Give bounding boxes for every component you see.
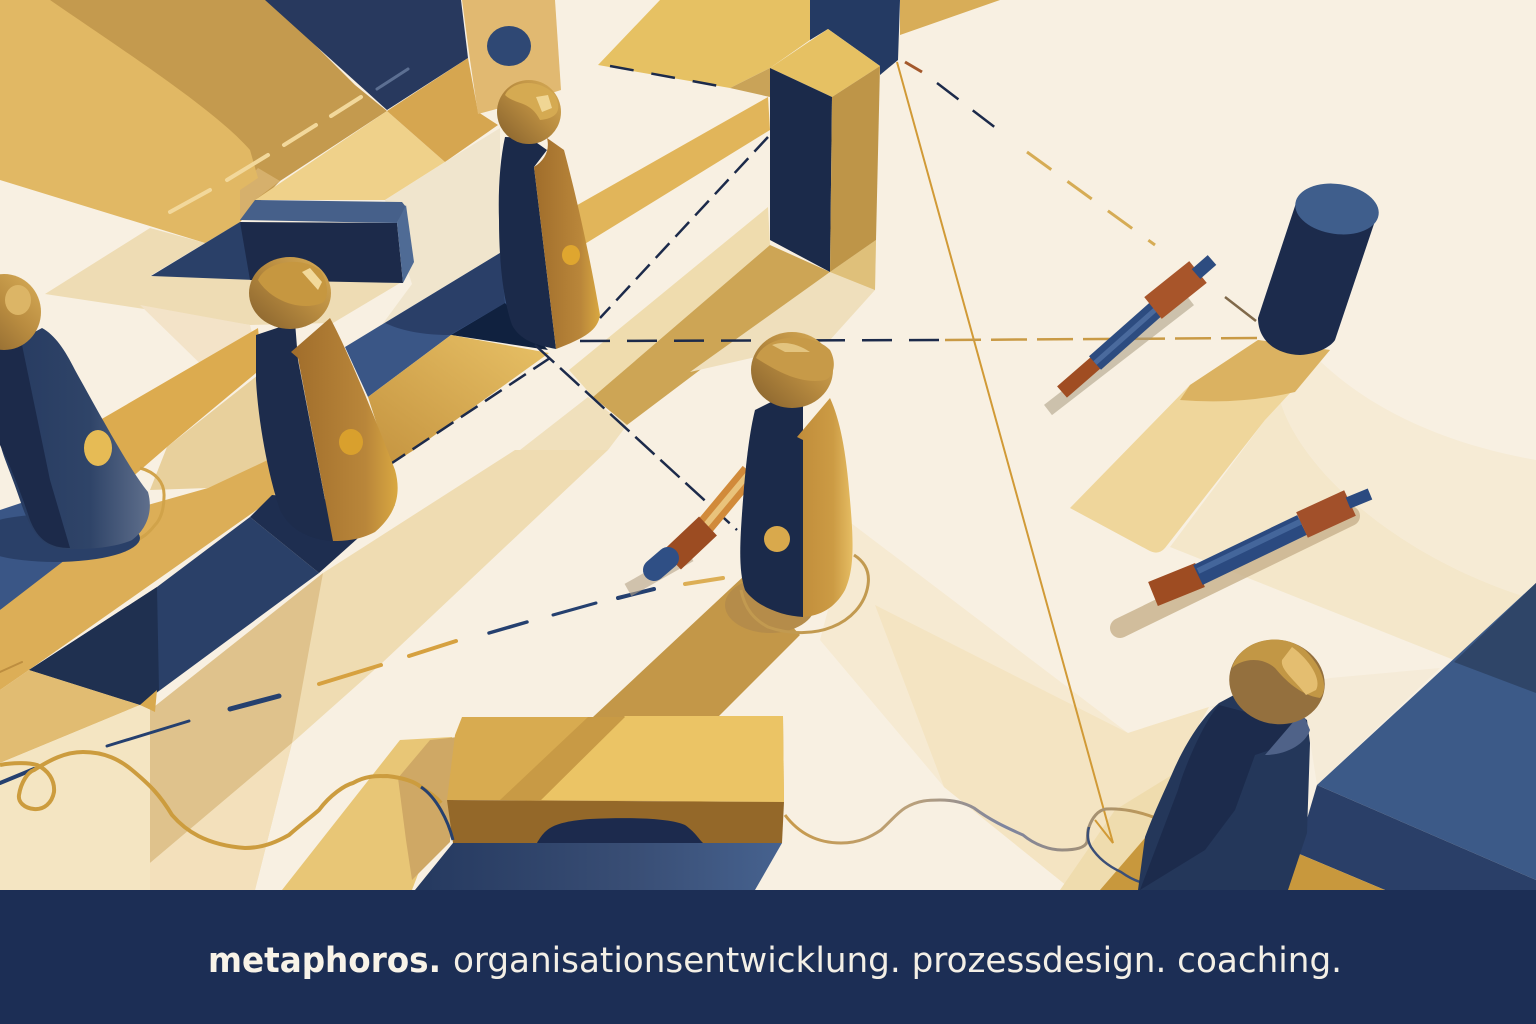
dot — [84, 430, 112, 466]
shadow — [1120, 516, 1350, 628]
right blue planes — [1100, 583, 1536, 890]
front face — [770, 68, 832, 272]
collar highlight — [1265, 718, 1310, 755]
head — [497, 80, 561, 144]
light beams on the floor — [820, 340, 1536, 890]
body — [1138, 695, 1310, 890]
tan corner — [240, 168, 280, 220]
block top — [770, 0, 900, 290]
body — [0, 328, 150, 549]
body gold — [534, 138, 600, 349]
right face — [830, 66, 880, 272]
body gold — [291, 318, 398, 541]
tip — [1348, 494, 1370, 503]
diagonal gold band — [100, 328, 262, 505]
shadow — [0, 514, 140, 562]
left wedge — [151, 222, 255, 280]
thin gold line — [897, 62, 1113, 843]
shadow — [1048, 300, 1190, 410]
top-left gold and navy shapes — [0, 0, 561, 378]
pawn 4 — [497, 80, 600, 349]
top face — [770, 29, 880, 97]
barrel — [700, 472, 750, 532]
top — [1292, 178, 1382, 240]
pale wedge left of pawn 2 — [150, 375, 272, 490]
body navy — [256, 322, 333, 541]
ring around pawn 3 — [741, 555, 868, 633]
highlight — [5, 285, 31, 315]
tail — [1153, 575, 1200, 594]
dark shading — [1140, 705, 1295, 890]
body navy — [499, 137, 556, 349]
paper with dot — [462, 0, 561, 114]
tip — [1196, 260, 1212, 274]
head — [0, 274, 41, 350]
pawn 5 — [1138, 631, 1333, 890]
pale diagonal bands — [150, 207, 876, 890]
pawn 2 — [256, 318, 398, 541]
head — [751, 332, 833, 408]
pawn 1 — [0, 274, 150, 562]
dark side — [0, 345, 70, 548]
head — [1221, 631, 1333, 733]
blue shadow under box — [415, 843, 782, 890]
light gold sweep — [0, 0, 258, 243]
dot — [764, 526, 790, 552]
dark navy wedge — [29, 587, 159, 705]
pen under pawn 3 — [628, 472, 750, 590]
shadow — [628, 555, 690, 590]
pawn 2 head — [249, 257, 331, 329]
footer bar — [0, 890, 1536, 1024]
cylinder — [1258, 178, 1382, 355]
gold facet — [387, 58, 498, 162]
body — [1258, 200, 1378, 355]
band below pawn 3 — [593, 575, 800, 717]
hammer block — [151, 200, 414, 283]
pale wedge left — [45, 228, 400, 325]
brown grip — [672, 526, 708, 560]
lower-left gold and navy shadows — [0, 458, 395, 890]
barrel — [1095, 309, 1156, 363]
navy back block — [810, 0, 900, 75]
body navy — [740, 400, 803, 617]
pawn 3 — [725, 332, 853, 633]
ring around pawn 1 — [135, 468, 164, 541]
body gold — [797, 398, 853, 617]
footer text regular: organisationsentwicklung. prozessdesign. coaching. — [453, 941, 1342, 981]
tail — [1062, 359, 1100, 392]
head light — [505, 83, 558, 120]
navy shape at top — [265, 0, 468, 110]
grip — [1153, 272, 1198, 308]
dashed connection lines — [170, 62, 1258, 530]
blue band behind pawns — [345, 253, 548, 397]
shadow base — [830, 240, 876, 290]
blue cap — [654, 558, 668, 570]
dark gold sweep — [50, 0, 387, 243]
box top — [447, 717, 784, 802]
dashed path lower left — [0, 578, 723, 783]
head light — [1232, 640, 1324, 698]
pen upper right — [1048, 260, 1212, 410]
front — [240, 222, 403, 283]
shadow — [725, 577, 815, 633]
dot on paper — [487, 26, 531, 66]
gold box — [415, 716, 784, 890]
top gold plane — [598, 0, 1000, 97]
head light — [756, 338, 834, 381]
pale gold diamond — [255, 111, 445, 200]
pen lower right — [1120, 494, 1370, 628]
footer text bold: metaphoros. — [208, 941, 441, 981]
gold wires — [0, 752, 1153, 882]
bottom gold band beside box — [282, 737, 458, 890]
dot — [562, 245, 580, 265]
side — [397, 205, 414, 283]
box front — [447, 800, 784, 843]
gold band centre — [368, 335, 549, 465]
gold shadow of cylinder — [1070, 340, 1330, 553]
dot — [339, 429, 363, 455]
barrel — [1198, 525, 1302, 575]
diagonal gold band upper right — [565, 97, 770, 250]
box notch — [537, 818, 703, 843]
grip — [1302, 503, 1350, 525]
pale beige wedge — [345, 128, 500, 375]
top — [240, 200, 406, 223]
navy floor shadow — [29, 517, 319, 705]
